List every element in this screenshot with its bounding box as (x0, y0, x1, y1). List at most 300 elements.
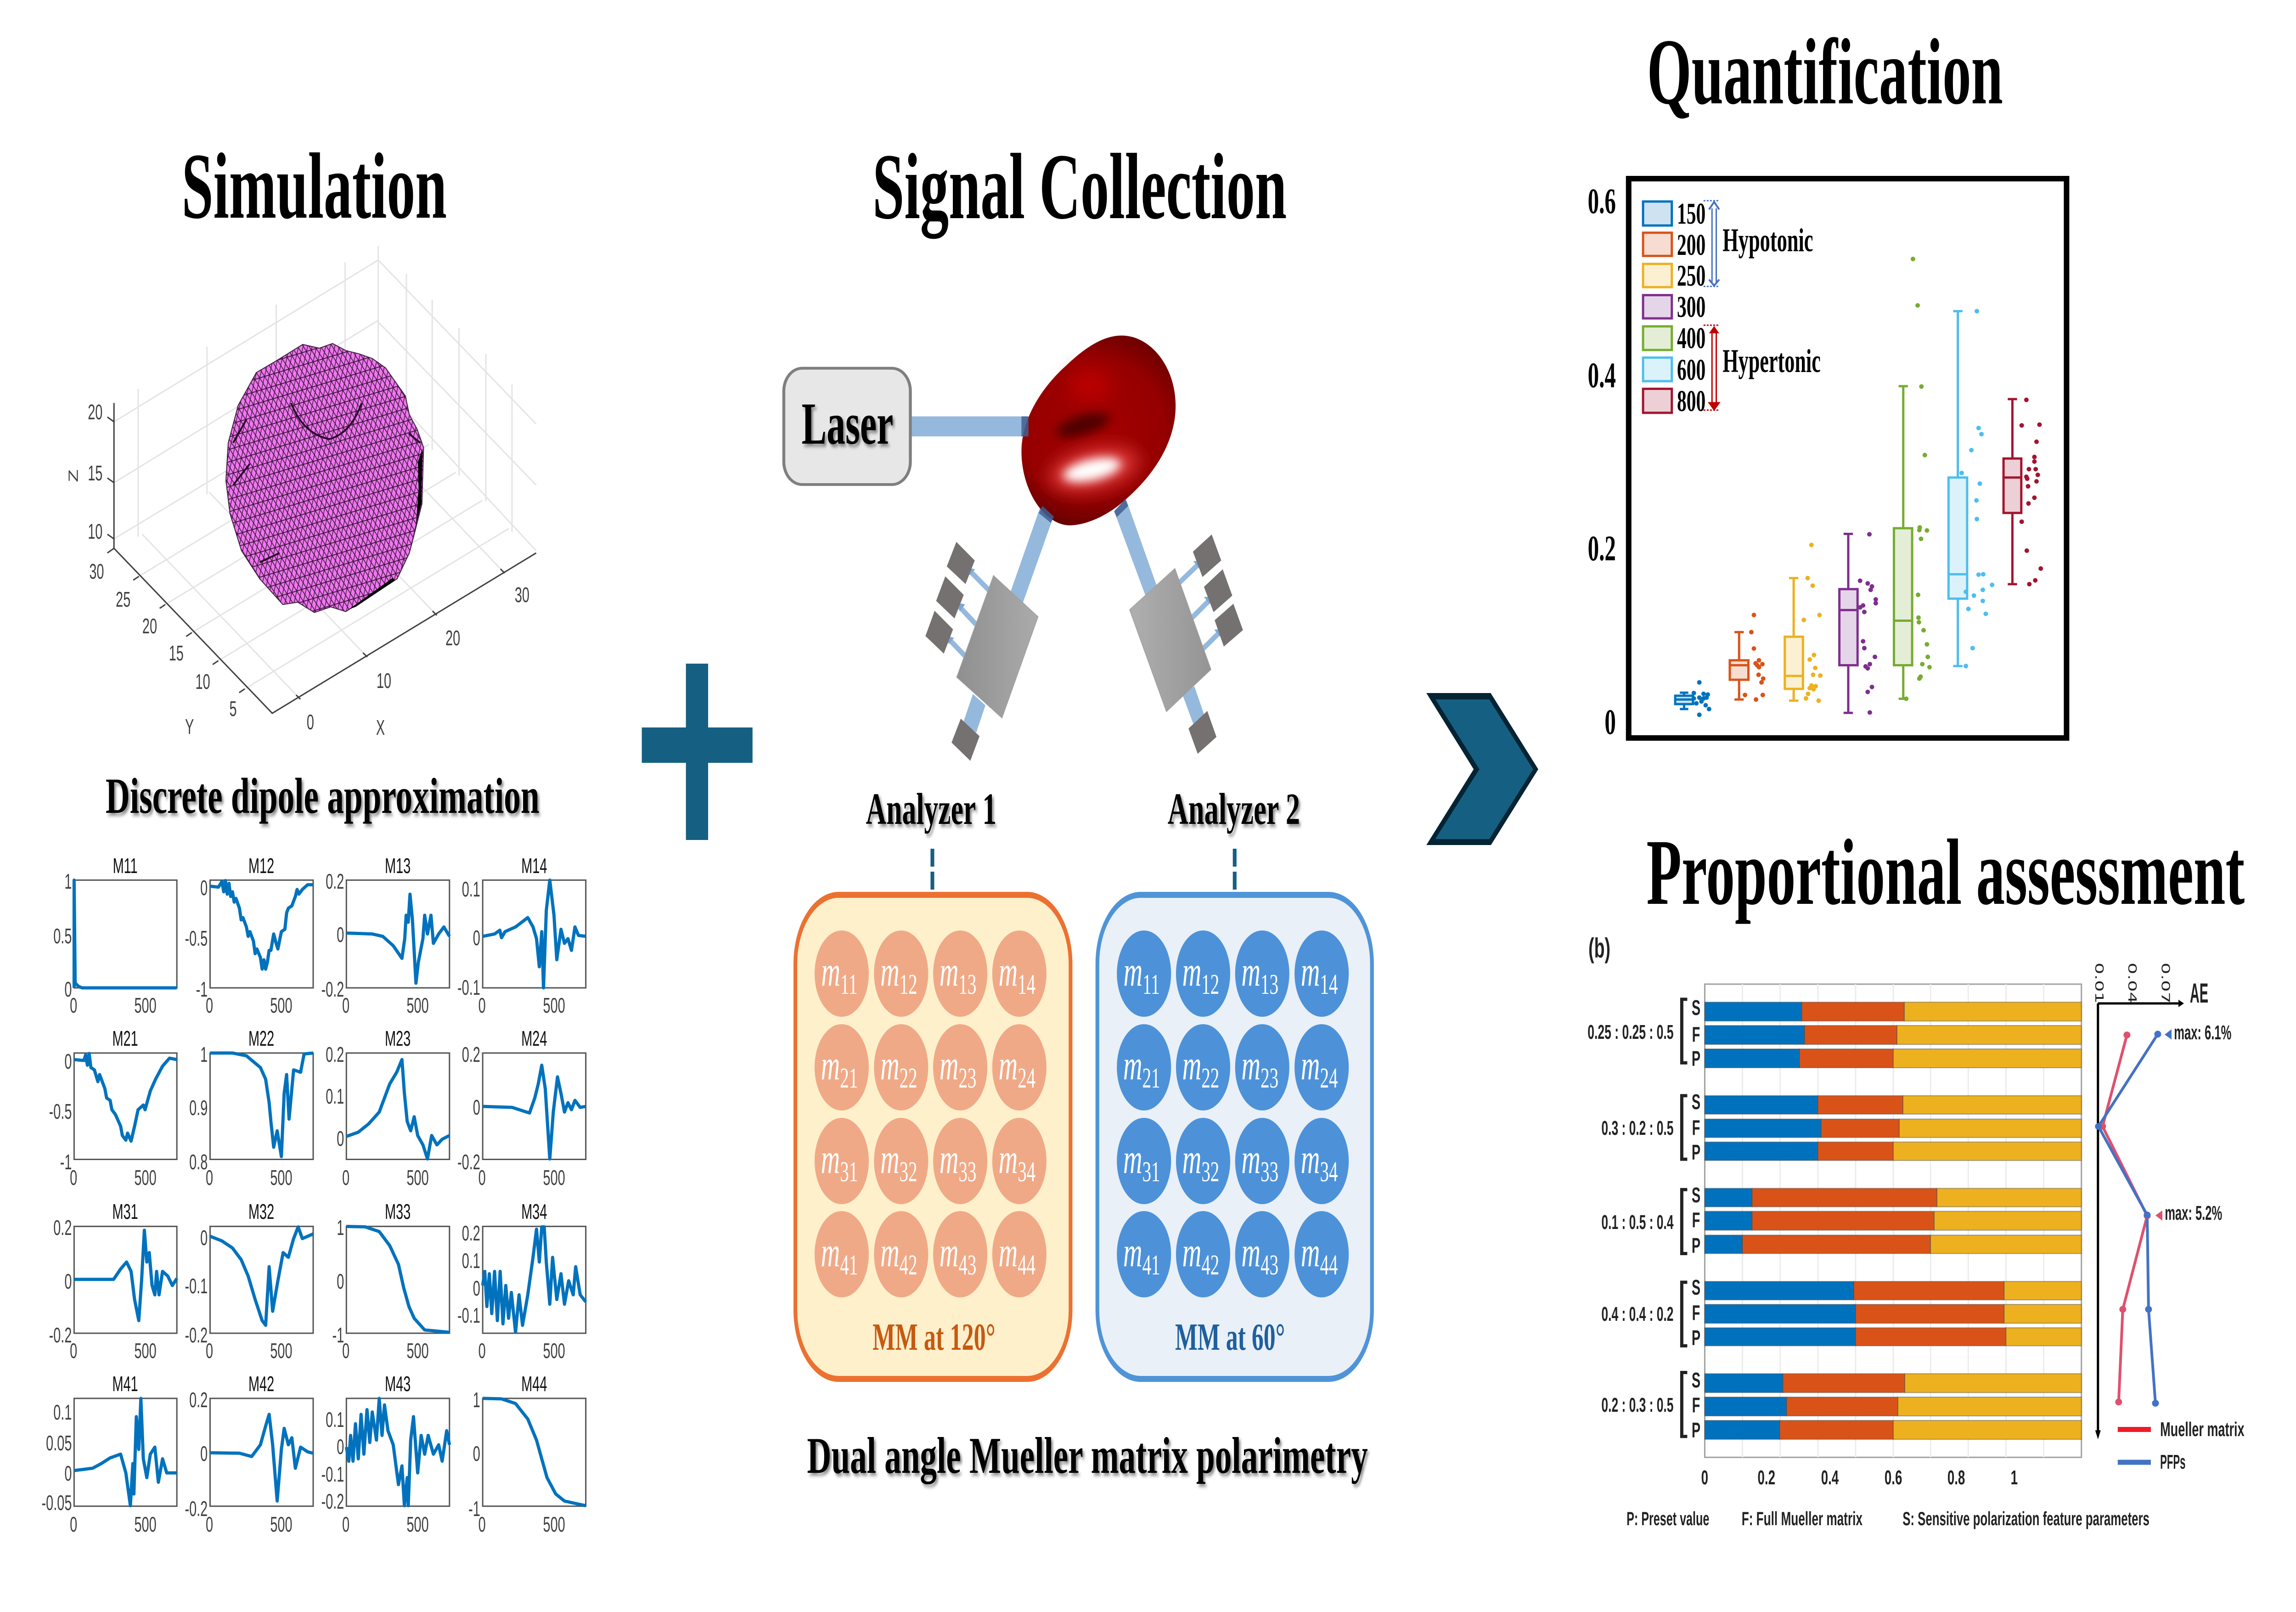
chart: 3D red blood cell dipole mesh: 10 (88, 520, 102, 544)
matrix elements: blue: 43 (1261, 1250, 1278, 1281)
chart: M13: M13 (385, 854, 411, 878)
legend labels: 400 (1677, 321, 1705, 355)
chart: M24: 500 (543, 1166, 565, 1190)
chart: M44: 500 (543, 1513, 565, 1537)
caption: MM at 60: MM at 60° (1175, 1316, 1285, 1358)
chart: M42 (185, 1372, 313, 1537)
chart: M14: -0.1 (457, 976, 480, 1000)
chart: M43: 500 (406, 1513, 429, 1537)
x axis labels: 0.8 (1947, 1466, 1965, 1489)
chart: M31: -0.2 (49, 1324, 72, 1347)
box: 600 (1948, 311, 1967, 666)
matrix elements: blue: 42 (1201, 1250, 1219, 1281)
chart: M33 (332, 1200, 450, 1363)
matrix elements: blue: m (1301, 1136, 1320, 1182)
panel: MM at 120 degrees (795, 895, 1070, 1379)
chart: M22: 0 (206, 1166, 213, 1190)
matrix elements: orange: m (998, 1136, 1018, 1182)
legend labels: 200 (1677, 228, 1705, 261)
chart: M33: -1 (332, 1324, 344, 1347)
matrix elements: blue: 41 (1142, 1250, 1160, 1281)
S F P row labels (1692, 996, 1700, 1443)
box: 400 (1894, 386, 1912, 699)
chart: M13: 500 (406, 994, 429, 1018)
S F P row labels: F (1692, 1393, 1700, 1417)
annotation: max 5.2%: max: 5.2% (2165, 1201, 2222, 1224)
label: Hypertonic: Hypertonic (1722, 343, 1821, 380)
x axis labels: 0.4 (1821, 1466, 1839, 1489)
matrix elements: blue: 32 (1201, 1156, 1219, 1188)
legend labels: 800 (1677, 384, 1705, 417)
matrix elements: orange: m (998, 948, 1018, 995)
chart: M44: M44 (521, 1372, 547, 1396)
chart: M32: -0.2 (185, 1324, 208, 1347)
arrow: beam to analyzer 2 (1114, 499, 1156, 596)
chart: 3D red blood cell dipole mesh: 30 (515, 583, 529, 607)
label: Laser: Laser (802, 391, 893, 457)
footnote: P Preset value: P: Preset value (1626, 1508, 1709, 1530)
chart: 3D red blood cell dipole mesh: Z (66, 469, 81, 482)
matrix elements: blue: 24 (1320, 1063, 1338, 1094)
bars: 0.2 : 0.3 : 0.5 (1705, 1374, 2082, 1439)
ratio labels (1587, 1020, 1674, 1416)
chart: M42: -0.2 (185, 1497, 208, 1521)
chart: M43: M43 (385, 1372, 411, 1396)
S F P row labels: F (1692, 1208, 1700, 1232)
chart: M34: 500 (543, 1339, 565, 1363)
title: Simulation: Simulation (182, 134, 447, 239)
analyzer 1 assembly (925, 542, 1038, 761)
matrix elements: orange (815, 930, 1047, 1297)
matrix elements: blue (1117, 930, 1349, 1297)
chart: M33: 0 (342, 1339, 349, 1363)
chart: M43: -0.1 (321, 1463, 344, 1487)
chart: M42: M42 (248, 1372, 274, 1396)
line: PFPs (2099, 1034, 2158, 1403)
matrix elements: orange: 32 (900, 1156, 917, 1188)
chart: M12: M12 (248, 854, 274, 878)
icon: plus sign (642, 664, 753, 840)
matrix elements: blue: 23 (1261, 1063, 1278, 1094)
matrix elements: blue: 31 (1142, 1156, 1160, 1188)
chart: M14: 0 (473, 926, 480, 950)
chart: M41: M41 (113, 1372, 138, 1396)
line: Mueller matrix (2103, 1035, 2147, 1402)
title: Quantification: Quantification (1647, 20, 2003, 124)
matrix elements: blue: m (1124, 948, 1142, 995)
chart: M22 (189, 1027, 313, 1190)
arrow: hypotonic range (1704, 201, 1719, 287)
chart: M42: 0 (200, 1442, 208, 1466)
chart: M21: -0.5 (49, 1100, 72, 1124)
chart: M24: 0 (473, 1096, 480, 1120)
matrix elements: orange: 42 (900, 1250, 917, 1281)
chart: M31: M31 (113, 1200, 138, 1224)
matrix elements: orange: 22 (900, 1063, 917, 1094)
y axis labels: 0 (1604, 703, 1616, 742)
AE tick labels: 0.07 (2159, 963, 2172, 1003)
AE tick labels: 0.04 (2126, 963, 2139, 1003)
chart: M44 (468, 1372, 586, 1537)
matrix elements: blue: 22 (1201, 1063, 1219, 1094)
matrix elements: orange: 33 (958, 1156, 976, 1188)
matrix elements: orange: m (821, 1042, 840, 1088)
arrow: laser beam (910, 417, 1029, 436)
box: 150 (1675, 693, 1693, 709)
matrix elements: blue: m (1241, 1042, 1261, 1088)
matrix elements: blue: 44 (1320, 1250, 1338, 1281)
chart: M13 (321, 854, 450, 1018)
legend: PFPs: PFPs (2160, 1450, 2185, 1473)
matrix elements: orange: m (880, 1042, 900, 1088)
chart: M12: -0.5 (185, 927, 208, 951)
axes (2098, 1003, 2178, 1433)
matrix elements: blue: 13 (1261, 969, 1278, 1000)
arrow: hypertonic range (1704, 325, 1720, 410)
chart: 3D red blood cell dipole mesh: 10 (377, 669, 391, 693)
chart: M44: 1 (473, 1388, 480, 1412)
box: 300 (1840, 534, 1857, 713)
footnote: F Full Mueller matrix: F: Full Mueller matrix (1742, 1508, 1863, 1530)
S F P row labels: P (1692, 1047, 1700, 1071)
chart: M11: 0 (70, 994, 77, 1018)
chart: M43: 0 (342, 1513, 349, 1537)
matrix elements: blue: m (1301, 1229, 1320, 1275)
chart: M44: 0 (473, 1442, 480, 1466)
ratio labels: 0.4 : 0.4 : 0.2 (1601, 1302, 1673, 1325)
legend swatches (1643, 202, 1672, 413)
chart: M42: 0.2 (189, 1388, 208, 1412)
chart: 3D red blood cell dipole mesh: X (376, 716, 385, 740)
chart: M41: -0.05 (42, 1491, 72, 1515)
chart: M33: M33 (385, 1200, 411, 1224)
chart: M41: 500 (134, 1513, 157, 1537)
chart: 3D red blood cell dipole mesh (66, 246, 536, 740)
data points (1694, 259, 2041, 715)
matrix elements: orange: m (821, 1136, 840, 1182)
chart: 3D red blood cell dipole mesh: 5 (229, 697, 237, 721)
chart: 3D red blood cell dipole mesh: 20 (142, 614, 157, 638)
matrix elements: orange: 21 (840, 1063, 858, 1094)
chart: M33: 1 (337, 1216, 344, 1240)
chart: M41: 0.05 (46, 1432, 72, 1455)
chart: M21: 500 (134, 1166, 157, 1190)
x axis labels: 0.6 (1885, 1466, 1902, 1489)
box: 200 (1730, 632, 1748, 699)
matrix elements: blue: 21 (1142, 1063, 1160, 1094)
chart: M22: M22 (248, 1027, 274, 1051)
chart: M41: 0 (64, 1462, 72, 1486)
chart: M23: 0 (337, 1127, 344, 1151)
analyzer 2 assembly (1130, 535, 1243, 754)
chart: M44: -1 (468, 1497, 480, 1521)
S F P row labels: F (1692, 1023, 1700, 1047)
S F P row labels: P (1692, 1326, 1700, 1350)
connector: analyzer 1 dashes (929, 849, 935, 890)
footnote: S Sensitive polarization feature parameters: S: Sensitive polarization feature parameters (1902, 1508, 2150, 1530)
chart: M32 (185, 1200, 313, 1363)
chart: M14: 500 (543, 994, 565, 1018)
S F P row labels: S (1692, 1090, 1700, 1114)
chart: M11: 0.5 (53, 924, 72, 948)
chart: M33: 0 (337, 1270, 344, 1294)
chart: M21 (49, 1027, 177, 1190)
icon: red blood cell (1021, 336, 1176, 525)
chart: M23: 500 (406, 1166, 429, 1190)
chart: 3D red blood cell dipole mesh: 20 (445, 626, 460, 650)
matrix elements: orange: m (940, 1136, 958, 1182)
chart: M31 (49, 1200, 177, 1363)
matrix elements: orange: m (821, 948, 840, 995)
matrix elements: orange: m (998, 1229, 1018, 1275)
chart: M42: 0 (206, 1513, 213, 1537)
arrow: beam to analyzer 1 (1010, 506, 1053, 603)
matrix elements: blue: m (1182, 1042, 1201, 1088)
chart: M32: 500 (270, 1339, 293, 1363)
x axis labels: 0.2 (1758, 1466, 1775, 1489)
chart: AE line plot (2093, 963, 2245, 1473)
matrix elements: blue: m (1182, 1136, 1201, 1182)
matrix elements: blue: m (1301, 1042, 1320, 1088)
arrow: chevron (1426, 693, 1538, 845)
matrix elements: orange: 12 (900, 969, 917, 1000)
ratio labels: 0.1 : 0.5 : 0.4 (1601, 1211, 1674, 1234)
caption: MM at 120: MM at 120° (872, 1316, 996, 1358)
chart: M24 (457, 1027, 586, 1190)
chart: M22: 0.9 (189, 1096, 208, 1120)
matrix elements: orange: 24 (1018, 1063, 1035, 1094)
box: 800 (2003, 399, 2021, 584)
chart: 3D red blood cell dipole mesh: 15 (88, 462, 102, 485)
chart: M41: 0 (70, 1513, 77, 1537)
chart: M34: M34 (521, 1200, 547, 1224)
chart: M22: 0.8 (189, 1150, 208, 1174)
legend labels: 300 (1677, 290, 1705, 323)
chart: M12: 0 (206, 994, 213, 1018)
matrix elements: blue: m (1241, 1136, 1261, 1182)
S F P row labels: S (1692, 1369, 1700, 1392)
chart: M24: 0.2 (462, 1043, 480, 1067)
chart: 3D red blood cell dipole mesh: 10 (196, 670, 210, 694)
S F P row labels: F (1692, 1116, 1700, 1140)
chart: M41 (42, 1372, 177, 1537)
title: Proportional assessment: Proportional assessment (1646, 820, 2245, 925)
chart: M13: -0.2 (321, 978, 344, 1002)
ratio labels: 0.25 : 0.25 : 0.5 (1587, 1020, 1673, 1043)
chart: M43 (321, 1372, 450, 1537)
matrix elements: orange: m (880, 1229, 900, 1275)
chart: M24: 0 (478, 1166, 486, 1190)
connector: analyzer 2 dashes (1232, 849, 1238, 890)
y axis labels: 0.6 (1588, 182, 1616, 221)
label: Hypotonic: Hypotonic (1722, 222, 1813, 259)
chart: M11 (53, 854, 177, 1018)
S F P row labels: S (1692, 996, 1700, 1020)
chart: M11: M11 (113, 854, 138, 878)
matrix elements: orange: m (940, 1042, 958, 1088)
chart: 3D red blood cell dipole mesh: 0 (307, 710, 314, 734)
matrix elements: blue: 11 (1142, 969, 1160, 1000)
chart: M43: 0.1 (326, 1408, 344, 1432)
matrix elements: blue: 14 (1320, 969, 1338, 1000)
S F P row labels: P (1692, 1419, 1700, 1443)
chart: M41: 0.1 (53, 1401, 72, 1425)
label: Analyzer 2: Analyzer 2 (1168, 784, 1300, 834)
chart: M32: 0 (206, 1339, 213, 1363)
chart: M34: 0 (473, 1277, 480, 1301)
chart: M14 (457, 854, 586, 1018)
matrix elements: orange: 11 (840, 969, 858, 1000)
chart: M23: M23 (385, 1027, 411, 1051)
chart: M23 (326, 1027, 450, 1190)
chart: M43: -0.2 (321, 1490, 344, 1514)
ratio labels: 0.2 : 0.3 : 0.5 (1601, 1393, 1673, 1416)
chart: M12: -1 (196, 978, 208, 1002)
matrix elements: orange: m (821, 1229, 840, 1275)
y axis labels: 0.2 (1588, 529, 1616, 569)
matrix elements: blue: 12 (1201, 969, 1219, 1000)
chart: M34: -0.1 (457, 1304, 480, 1328)
chart: M23: 0.2 (326, 1043, 344, 1067)
diagram: laser, red blood cell and analyzers (784, 336, 1243, 761)
matrix elements: blue: m (1123, 1136, 1142, 1182)
S F P row labels: P (1692, 1234, 1700, 1258)
ratio labels: 0.3 : 0.2 : 0.5 (1601, 1116, 1673, 1139)
chart: M12: 0 (200, 876, 208, 900)
chart: M14: 0.1 (462, 878, 480, 902)
matrix elements: orange: 41 (840, 1250, 858, 1281)
chart: 3D red blood cell dipole mesh: Y (185, 715, 194, 739)
matrix elements: blue: m (1182, 948, 1201, 995)
chart: M44: 0 (478, 1513, 486, 1537)
chart: M11: 1 (64, 870, 72, 894)
chart: M22: 1 (200, 1043, 208, 1067)
chart: M34: 0.1 (462, 1249, 480, 1273)
bars: 0.1 : 0.5 : 0.4 (1705, 1189, 2082, 1253)
chart: M13: 0.2 (326, 870, 344, 894)
matrix elements: orange: m (940, 948, 958, 995)
matrix elements: blue: 34 (1320, 1156, 1338, 1188)
label: Analyzer 1: Analyzer 1 (866, 784, 996, 834)
chart: 3D red blood cell dipole mesh: 20 (88, 400, 102, 424)
chart: M31: 0 (70, 1339, 77, 1363)
chart: proportional stacked bars (1587, 933, 2082, 1489)
chart: M32: -0.1 (185, 1274, 208, 1298)
chart: osmolarity box plot (1588, 179, 2066, 742)
chart: M34: 0 (478, 1339, 486, 1363)
legend labels (1677, 197, 1705, 417)
heading: Discrete dipole approximation: Discrete dipole approximation (106, 768, 540, 824)
x axis labels: 0 (1701, 1466, 1708, 1489)
chart: M23: 0 (342, 1166, 349, 1190)
matrix elements: orange: m (880, 1136, 900, 1182)
annotation: max 6.1%: max: 6.1% (2174, 1021, 2231, 1044)
chart: M34 (457, 1200, 586, 1363)
box: 250 (1785, 578, 1803, 701)
bars: 0.4 : 0.4 : 0.2 (1705, 1281, 2082, 1346)
legend: Mueller matrix: Mueller matrix (2160, 1418, 2245, 1441)
matrix elements: blue: m (1182, 1229, 1201, 1275)
chart: M11: 500 (134, 994, 157, 1018)
chart: M43: 0 (337, 1435, 344, 1459)
chart: M33: 500 (406, 1339, 429, 1363)
chart: M21: 0 (70, 1166, 77, 1190)
chart: 3D red blood cell dipole mesh: 30 (89, 560, 104, 584)
matrix elements: blue: m (1123, 1229, 1142, 1275)
legend labels: 250 (1677, 259, 1705, 292)
icon: laser box (784, 368, 910, 485)
matrix elements: blue: m (1241, 948, 1261, 995)
chart: M12 (185, 854, 313, 1018)
chart: M12: 500 (270, 994, 293, 1018)
chart: M14: 0 (478, 994, 486, 1018)
AE tick labels (2093, 963, 2172, 1003)
chart: M24: M24 (521, 1027, 547, 1051)
chart: M24: -0.2 (457, 1150, 480, 1174)
bars: 0.3 : 0.2 : 0.5 (1705, 1096, 2082, 1161)
chart: M31: 500 (134, 1339, 157, 1363)
chart: M11: 0 (64, 978, 72, 1002)
chart: M42: 500 (270, 1513, 293, 1537)
y axis labels: 0.4 (1588, 356, 1616, 395)
matrix elements: orange: 43 (958, 1250, 976, 1281)
S F P row labels: P (1692, 1141, 1700, 1165)
chart: M31: 0 (64, 1270, 72, 1294)
matrix elements: orange: 14 (1018, 969, 1035, 1000)
matrix elements: orange: m (940, 1229, 958, 1275)
matrix elements: orange: 23 (958, 1063, 976, 1094)
matrix elements: orange: 34 (1018, 1156, 1035, 1188)
chart: 3D red blood cell dipole mesh: 15 (169, 642, 184, 665)
matrix elements: blue: m (1301, 948, 1320, 995)
S F P row labels: F (1692, 1301, 1700, 1325)
x axis labels: 1 (2011, 1466, 2018, 1489)
axis label: AE: AE (2190, 978, 2208, 1009)
chart grid: Mueller matrix elements (42, 854, 586, 1537)
bars: 0.25 : 0.25 : 0.5 (1705, 1002, 2082, 1068)
matrix elements: blue: m (1241, 1229, 1261, 1275)
chart: M21: M21 (113, 1027, 138, 1051)
y axis labels (1588, 182, 1616, 742)
chart: M34: 0.2 (462, 1222, 480, 1246)
matrix elements: blue: m (1123, 1042, 1142, 1088)
icon: mesh cell body (226, 344, 423, 613)
AE tick labels: 0.01 (2093, 963, 2106, 1003)
x axis labels (1701, 1466, 2018, 1489)
chart: M21: -1 (60, 1150, 72, 1174)
chart: M21: 0 (64, 1050, 72, 1074)
chart: M32: 0 (200, 1226, 208, 1250)
matrix elements: orange: 31 (840, 1156, 858, 1188)
chart: 3D red blood cell dipole mesh: 25 (116, 588, 130, 612)
matrix elements: orange: 44 (1018, 1250, 1035, 1281)
chart: M13: 0 (337, 923, 344, 947)
chart: M13: 0 (342, 994, 349, 1018)
legend labels: 150 (1677, 197, 1705, 230)
chart: M22: 500 (270, 1166, 293, 1190)
matrix elements: orange: m (998, 1042, 1018, 1088)
brackets (1682, 999, 1687, 1437)
matrix elements: blue: 33 (1261, 1156, 1278, 1188)
legend lines (2118, 1427, 2151, 1432)
matrix elements: orange: 13 (958, 969, 976, 1000)
chart: M23: 0.1 (326, 1085, 344, 1109)
panel label: (b) (1588, 933, 1610, 964)
chart: M31: 0.2 (53, 1216, 72, 1240)
S F P row labels: S (1692, 1276, 1700, 1300)
heading: Dual angle Mueller matrix polarimetry: Dual angle Mueller matrix polarimetry (807, 1428, 1368, 1484)
panel: MM at 60 degrees (1097, 895, 1372, 1379)
